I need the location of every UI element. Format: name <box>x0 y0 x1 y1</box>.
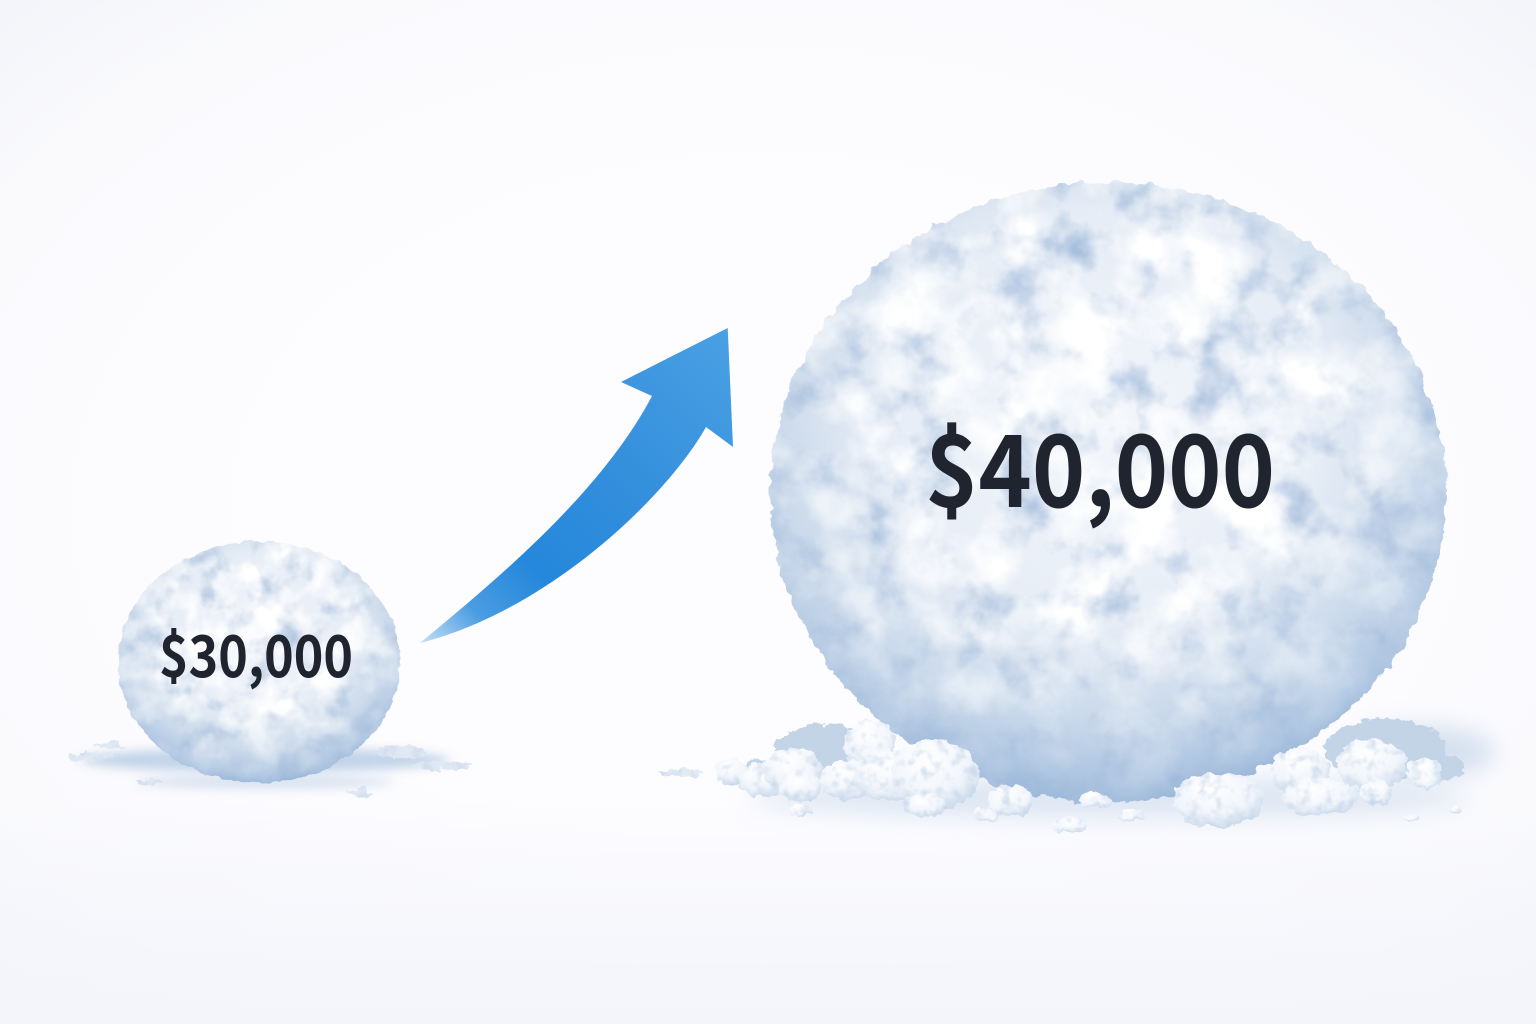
small snowball <box>118 541 400 783</box>
large snowball back shadow and snow drift <box>735 718 1495 818</box>
label: $40,000: $40,000 <box>925 391 1275 536</box>
small snowball scatter on the ground <box>68 742 470 797</box>
label: $30,000: $30,000 <box>159 610 353 694</box>
large snowball <box>770 182 1446 802</box>
snow pile around large snowball <box>658 720 1461 833</box>
arrow: upward growth <box>420 328 733 643</box>
